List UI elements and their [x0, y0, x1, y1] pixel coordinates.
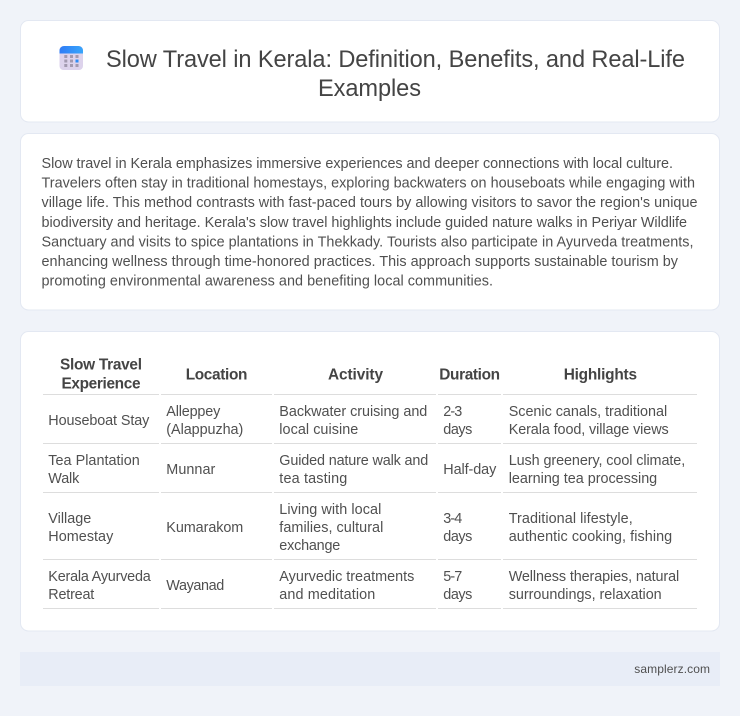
table row: Village Homestay: Village — [48, 511, 91, 527]
text block: introduction: Slow travel in Kerala emphasizes immersive experiences and deeper connections with local culture. — [42, 156, 673, 172]
table row: Kerala Ayurveda Retreat: days — [443, 587, 472, 603]
table row: Houseboat Stay: Houseboat Stay — [48, 413, 150, 429]
title — [106, 47, 685, 102]
table row: Tea Plantation Walk: tea tasting — [279, 471, 347, 487]
table row: Houseboat Stay: local cuisine — [279, 422, 358, 438]
table row: Tea Plantation Walk: Walk — [48, 471, 80, 487]
panel: table card — [20, 332, 720, 631]
table row: Kerala Ayurveda Retreat: surroundings, relaxation — [509, 587, 662, 603]
table row: Village Homestay: Kumarakom — [166, 520, 243, 536]
table row: Tea Plantation Walk: Munnar — [166, 462, 216, 478]
table row: Kerala Ayurveda Retreat: Retreat — [48, 587, 94, 603]
table row: Tea Plantation Walk: learning tea processing — [509, 471, 657, 487]
table row: Kerala Ayurveda Retreat — [48, 569, 679, 603]
table header: Experience — [62, 376, 141, 393]
panel: title card — [20, 20, 720, 122]
table row: Houseboat Stay: (Alappuzha) — [166, 422, 243, 438]
table row: Tea Plantation Walk: Lush greenery, cool climate, — [509, 453, 685, 469]
text block: introduction — [42, 156, 698, 290]
icon: calendar — [60, 46, 83, 70]
table row: Kerala Ayurveda Retreat: Wellness therapies, natural — [509, 569, 679, 585]
table header: Highlights — [564, 367, 637, 384]
table row: Village Homestay: 3-4 — [443, 511, 462, 527]
table row: Village Homestay: Living with local — [279, 502, 381, 518]
footer: samplerz.com — [634, 662, 710, 676]
table row: Houseboat Stay — [48, 404, 669, 438]
table row: Village Homestay: days — [443, 529, 472, 545]
table row: Kerala Ayurveda Retreat: 5-7 — [443, 569, 462, 585]
text block: introduction: promoting environmental awareness and benefiting local communities. — [42, 274, 493, 290]
table row: Tea Plantation Walk: Tea Plantation — [48, 453, 140, 469]
table row: Village Homestay: exchange — [279, 538, 340, 554]
table row: Kerala Ayurveda Retreat: Wayanad — [166, 578, 224, 594]
table row: Village Homestay — [48, 502, 672, 554]
table row: Kerala Ayurveda Retreat: Kerala Ayurveda — [48, 569, 151, 585]
table row: Village Homestay: families, cultural — [279, 520, 383, 536]
table row: Houseboat Stay: Kerala food, village views — [509, 422, 669, 438]
table header: Activity — [328, 367, 383, 384]
table row: Tea Plantation Walk: Guided nature walk and — [279, 453, 428, 469]
table row: Kerala Ayurveda Retreat: and meditation — [279, 587, 375, 603]
table header: Slow Travel — [60, 357, 142, 374]
table row: Houseboat Stay: Scenic canals, traditional — [509, 404, 667, 420]
table header — [60, 357, 637, 393]
title: Slow Travel in Kerala: Definition, Benefits, and Real-Life — [106, 47, 685, 73]
table row: Village Homestay: Traditional lifestyle, — [509, 511, 633, 527]
table row: Houseboat Stay: Alleppey — [166, 404, 221, 420]
text block: introduction: Travelers often stay in traditional homestays, exploring backwaters on houseboats while engaging with — [42, 176, 695, 192]
text block: introduction: biodiversity and heritage. Kerala's slow travel highlights include guided nature walks in Periyar Wildlife — [42, 215, 687, 231]
table row: Village Homestay: Homestay — [48, 529, 114, 545]
text block: introduction: Sanctuary and visits to spice plantations in Thekkady. Tourists also participate in Ayurveda treatments, — [42, 234, 694, 250]
table row: Tea Plantation Walk: Half-day — [443, 462, 497, 478]
table row: Tea Plantation Walk — [48, 453, 685, 487]
table header: Duration — [439, 367, 500, 384]
table row: Village Homestay: authentic cooking, fishing — [509, 529, 672, 545]
table row: Houseboat Stay: 2-3 — [443, 404, 462, 420]
table row: Houseboat Stay: Backwater cruising and — [279, 404, 427, 420]
text block: introduction: village life. This method contrasts with fast-paced tours by allowing visitors to savor the region's unique — [42, 195, 698, 211]
title: Examples — [318, 76, 421, 102]
footer — [20, 652, 720, 686]
panel: description — [20, 134, 720, 310]
text block: introduction: enhancing wellness through time-honored practices. This approach supports sustainable tourism by — [42, 254, 679, 270]
table row: Kerala Ayurveda Retreat: Ayurvedic treatments — [279, 569, 414, 585]
table header: Location — [186, 367, 247, 384]
table row: Houseboat Stay: days — [443, 422, 472, 438]
